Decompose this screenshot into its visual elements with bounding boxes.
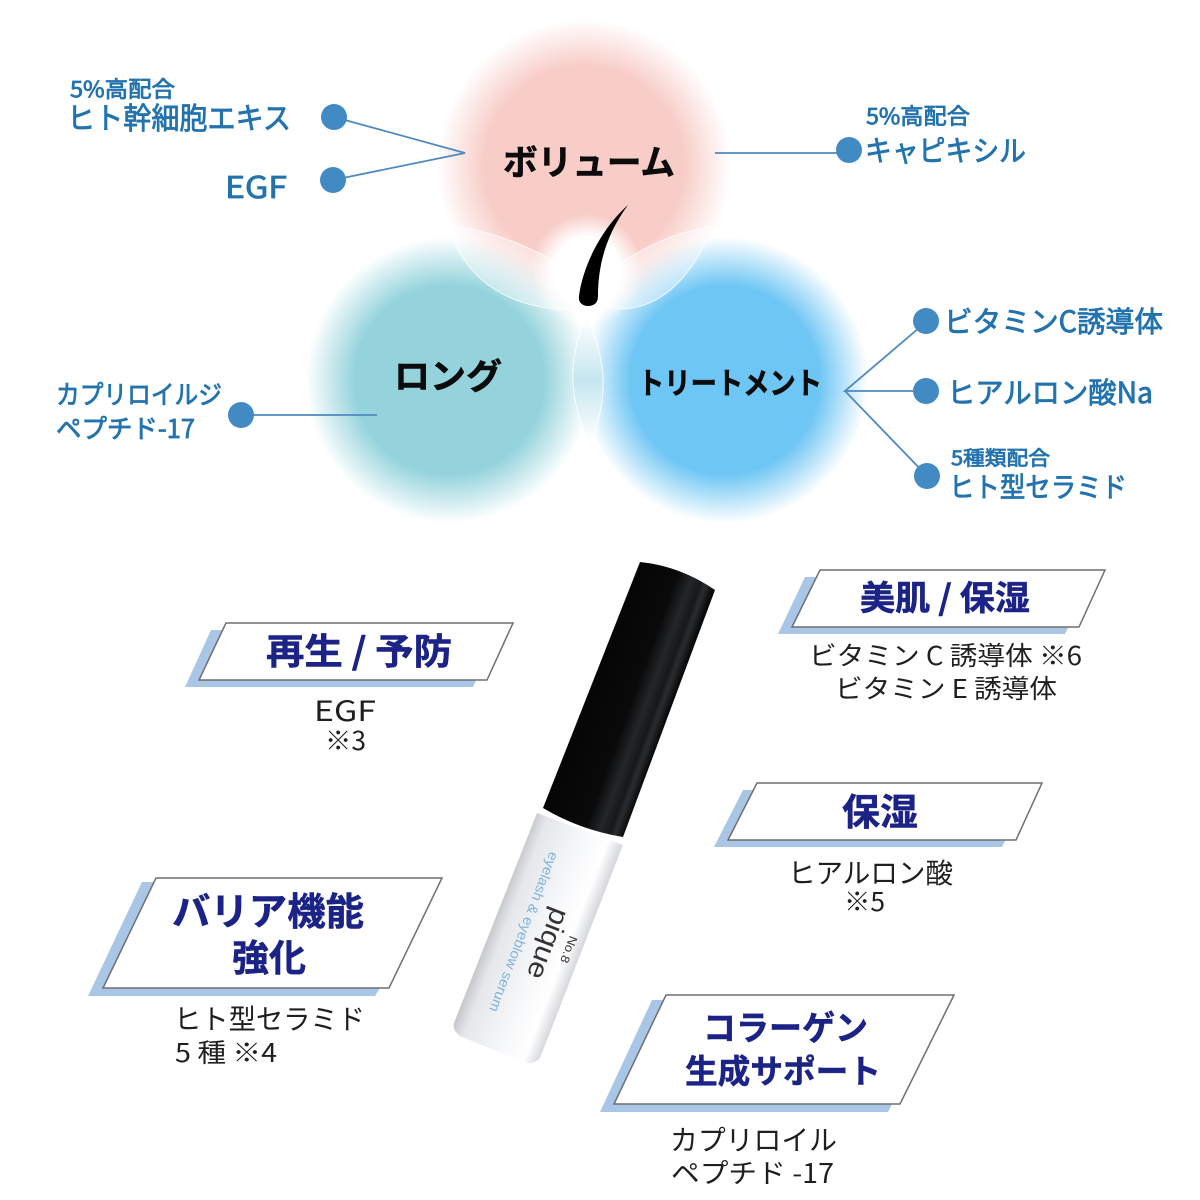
overlap: volume and long [447,225,568,310]
panel: moisture: 保湿 [842,782,918,836]
panel: regeneration / prevention: EGF [314,690,376,730]
circle: long [306,237,592,523]
ingredient: human stem cell extract: ヒト幹細胞エキス [67,94,291,138]
bottle text: eyelash & eyeblow serum [486,850,562,1014]
panel: moisture: ※5 [844,882,885,919]
label: treatment: トリートメント [638,359,822,403]
circle: volume [437,19,731,313]
panel: skin / moisture: ビタミン E 誘導体 [835,669,1057,706]
panel: skin / moisture [778,570,1105,706]
ingredient: human ceramide [949,442,1127,506]
overlap: volume and treatment [606,227,713,309]
panel: collagen production support: ペプチド -17 [671,1152,834,1191]
center glow [531,214,643,326]
panel: collagen production support: カプリロイル [670,1119,837,1159]
icon: hair [579,205,628,306]
ingredient: human ceramide: ヒト型セラミド [949,466,1127,506]
circle: treatment [582,237,868,523]
panel: regeneration / prevention: 再生 / 予防 [266,623,452,675]
panel: barrier function: ヒト型セラミド [174,998,365,1038]
panel: moisture: ヒアルロン酸 [788,852,953,892]
panel: barrier function: 5 種 ※4 [175,1033,277,1070]
ingredient: sodium hyaluronate: ヒアルロン酸Na [947,370,1153,412]
connector lines [241,117,927,476]
ingredient: capixyl [865,99,1026,170]
ingredient labels [56,72,1163,506]
product: serum bottle [454,562,715,1063]
panel: collagen production support: コラーゲン [703,1001,868,1050]
panel: regeneration / prevention: ※3 [325,721,366,758]
panel: skin / moisture: 美肌 / 保湿 [860,571,1030,620]
ingredient: capixyl: キャピキシル [865,128,1026,170]
panel: skin / moisture: ビタミン C 誘導体 ※6 [809,636,1082,673]
bottle text: pique [521,904,575,984]
ingredient: capryloyl dipeptide-17: ペプチド-17 [56,409,195,446]
diagram: three benefit circles [306,19,868,523]
ingredient: EGF: EGF [225,163,287,207]
panel: collagen production support: 生成サポート [685,1045,881,1093]
label: long: ロング [394,349,502,400]
ingredient: capixyl: 5%高配合 [866,99,970,131]
panel: barrier function [88,878,442,1070]
ingredient: human ceramide: 5種類配合 [951,442,1050,471]
ingredient: human stem cell extract: 5%高配合 [70,72,175,104]
circle labels [394,135,822,403]
panel: collagen production support [600,995,954,1191]
connector dots [228,104,940,489]
panel: regeneration / prevention [185,623,513,758]
label: volume: ボリューム [503,135,675,186]
panel: barrier function: バリア機能 [172,881,364,936]
ingredient: vitamin C derivative: ビタミンC誘導体 [944,299,1163,341]
ingredient: capryloyl dipeptide-17 [56,375,222,446]
ingredient: human stem cell extract [67,72,291,138]
panel: barrier function: 強化 [232,928,306,982]
panel: moisture [714,782,1042,919]
bottle text: No.8 [557,934,580,965]
ingredient: capryloyl dipeptide-17: カプリロイルジ [56,375,222,412]
bottle body [454,813,623,1063]
overlap: long and treatment [573,317,603,443]
bottle cap [543,562,715,837]
